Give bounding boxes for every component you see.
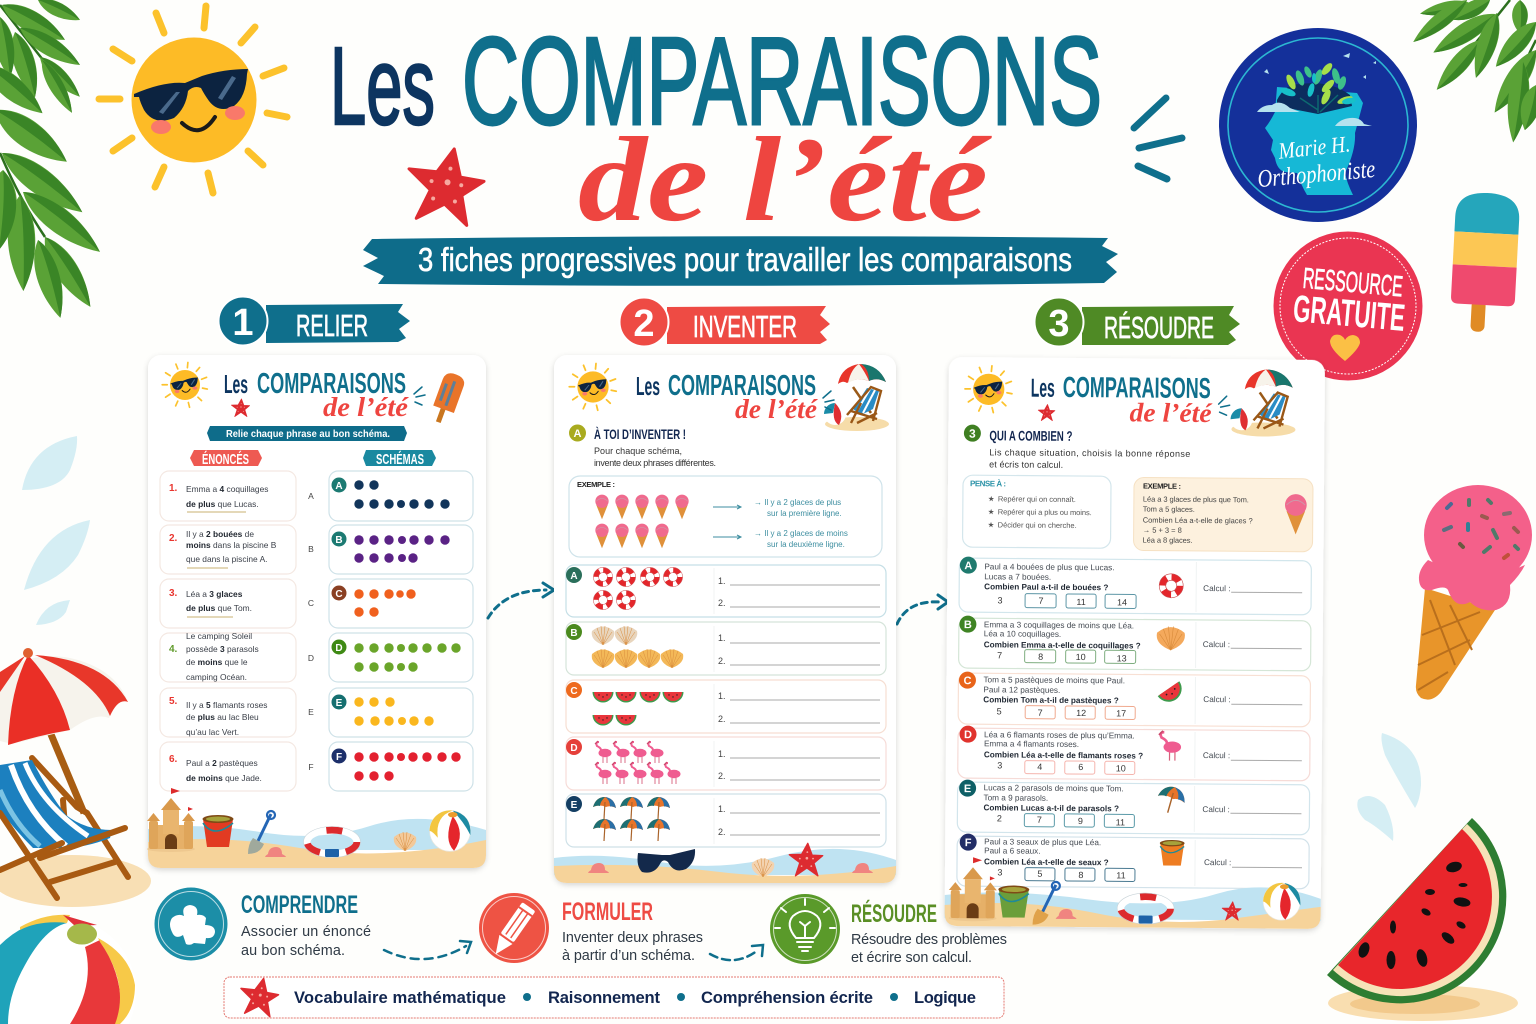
problem A: Calcul : [1203, 584, 1231, 593]
step 3 heading: résoudre: RÉSOUDRE [1104, 310, 1214, 345]
step 3 heading: résoudre [1034, 298, 1240, 346]
badge: ressource gratuite [1274, 232, 1422, 380]
letters between columns: E [308, 707, 314, 717]
row D: flamingos [566, 737, 886, 790]
problem F: Calcul : [1204, 858, 1231, 867]
footer: skills strip [224, 976, 1004, 1018]
problem F: F [965, 837, 972, 849]
row B: shells [566, 622, 886, 675]
example box: sur la première ligne. [767, 509, 842, 518]
pense à box: Repérer qui on connaît. [998, 494, 1076, 504]
letters between columns: A [308, 491, 314, 501]
row E: parasols: E [571, 800, 578, 811]
problem E: Combien Lucas a-t-il de parasols ? [983, 803, 1119, 813]
logo: Marie H. Orthophoniste: Orthophoniste [1256, 156, 1376, 193]
row D: flamingos: 2. [718, 771, 726, 781]
row C: watermelons: 1. [718, 691, 726, 701]
pense à box: Décider qui on cherche. [998, 520, 1077, 530]
arrow: formuler to résoudre [710, 945, 763, 960]
fiche 2 beach strip [554, 843, 896, 883]
logo clouds and birds [1257, 53, 1376, 126]
schema letter badges: D [335, 643, 343, 654]
problem E [957, 780, 1310, 835]
statements list: Léa a 3 glaces [186, 589, 243, 599]
statements list: de plus que Tom. [186, 603, 252, 613]
statements list: 1. [169, 483, 178, 494]
icon: small sun [162, 362, 207, 407]
example box: EXEMPLE : [577, 480, 615, 489]
problem F: Paul a 3 seaux de plus que Léa. [984, 837, 1101, 847]
problem A: Combien Paul a-t-il de bouées ? [984, 582, 1108, 592]
letters between columns: D [308, 653, 314, 663]
row A: life rings: A [570, 571, 578, 582]
decoration: small sparks [823, 391, 834, 410]
problem B [959, 616, 1311, 671]
title: de l’été [578, 113, 993, 247]
letters between columns: C [308, 598, 314, 608]
row D: flamingos: D [570, 743, 578, 754]
schema A dots [354, 480, 450, 509]
row A: life rings [566, 565, 886, 617]
illustration: beach chair and umbrella [0, 648, 151, 907]
problem D: 3 [997, 760, 1002, 770]
problem F: 11 [1116, 870, 1126, 880]
problem B: 8 [1038, 652, 1043, 662]
problem C: Tom a 5 pastèques de moins que Paul. [983, 675, 1125, 685]
badge: ressource gratuite: RESSOURCE [1302, 263, 1404, 303]
statements list: Paul a 2 pastèques [186, 758, 258, 768]
column heading: énoncés: ÉNONCÉS [202, 451, 249, 468]
title [330, 13, 1102, 247]
problem C: C [963, 675, 972, 687]
icon: orange popsicle [428, 371, 467, 426]
problem E: E [964, 783, 971, 795]
activity heading: À TOI D’INVENTER ! [594, 426, 686, 442]
decoration: small sparks [414, 387, 425, 405]
problem E: Lucas a 2 parasols de moins que Tom. [984, 783, 1124, 793]
activity heading [964, 425, 1190, 471]
problem D: Calcul : [1203, 751, 1230, 760]
statements list: 2. [169, 533, 178, 544]
problem F: 3 [997, 867, 1003, 877]
fiche 3 title: Les [1031, 373, 1055, 403]
decoration: water drops left [22, 436, 90, 625]
problem F: Combien Léa a-t-elle de seaux ? [984, 857, 1109, 867]
example box: → Il y a 2 glaces de plus [754, 498, 841, 507]
problem B: Combien Emma a-t-elle de coquillages ? [984, 640, 1141, 651]
skill: formuler: FORMULER [562, 898, 653, 926]
problem C: 12 [1076, 708, 1086, 718]
illustration: big ice cream cone [1416, 485, 1532, 700]
pense à box: Repérer qui a plus ou moins. [998, 507, 1092, 517]
step 1 heading: relier [218, 296, 410, 346]
panel: fiche 2 inventer [554, 355, 896, 883]
fiche 3 title: COMPARAISONS [1063, 372, 1211, 405]
example box: sur la deuxième ligne. [767, 540, 845, 549]
problem E: 7 [1037, 815, 1042, 825]
icon: small sun [569, 364, 616, 410]
arrow: card 2 to card 3 [897, 595, 948, 624]
schema letter badges: C [335, 589, 343, 600]
fiche 1 instruction banner [207, 426, 407, 441]
illustration: beach ball [0, 915, 136, 1024]
skill: comprendre [154, 888, 371, 960]
row E: parasols: 1. [718, 804, 726, 814]
fiche 3 title: de l’été [1129, 397, 1213, 428]
exemple box: → 5 + 3 = 8 [1143, 526, 1182, 535]
row B: shells: B [570, 628, 578, 639]
icon: sun with sunglasses [99, 6, 287, 193]
fiche 3 beach strip [945, 857, 1321, 929]
problem E: 9 [1078, 816, 1083, 826]
icon: small star [231, 399, 250, 417]
banner: subtitle: 3 fiches progressives pour travailler les comparaisons [418, 241, 1072, 278]
footer: skills strip: Vocabulaire mathématique [294, 988, 506, 1007]
skill: formuler: Inventer deux phrases [562, 930, 703, 946]
fiche 1 title: de l’été [323, 392, 409, 422]
schema C dots [354, 589, 416, 617]
schema E dots [354, 697, 434, 726]
logo: Marie H. Orthophoniste: Marie H. [1276, 131, 1351, 164]
skill: formuler: à partir d’un schéma. [562, 948, 695, 964]
schema letter badges [332, 478, 346, 764]
statements list: de plus au lac Bleu [186, 712, 259, 722]
statements list: Il y a 5 flamants roses [186, 700, 267, 710]
statements list: de plus que Lucas. [186, 499, 259, 509]
problem C: 7 [1038, 708, 1043, 718]
statements list: Emma a 4 coquillages [186, 484, 268, 494]
fiche 1 title [224, 368, 409, 422]
statements list: 5. [169, 696, 178, 707]
problem B: Emma a 3 coquillages de moins que Léa. [984, 620, 1134, 630]
icon: beach chair set [1230, 369, 1296, 437]
column heading: schémas [363, 450, 436, 468]
statements list: 6. [169, 754, 178, 765]
problem B: 7 [997, 650, 1002, 660]
problem A: Paul a 4 bouées de plus que Lucas. [984, 562, 1115, 572]
skill: comprendre: Associer un énoncé [241, 924, 371, 940]
problem C [958, 672, 1311, 727]
schema F dots [354, 752, 461, 781]
pense à box: ★ [988, 520, 995, 529]
decoration: water drops right [1357, 733, 1421, 841]
row A: life rings: 1. [718, 576, 726, 586]
letters between columns: F [308, 762, 314, 772]
problem D: Combien Léa a-t-elle de flamants roses ? [984, 750, 1143, 761]
problem C: Calcul : [1203, 695, 1231, 704]
step 2 heading: inventer [620, 298, 830, 346]
row B: shells: 2. [718, 656, 726, 666]
skill: résoudre: RÉSOUDRE [851, 899, 937, 928]
letters between columns [308, 491, 314, 772]
problem B: Calcul : [1203, 640, 1230, 649]
problem B: B [964, 619, 972, 631]
fiche 2 title [636, 370, 818, 424]
icon: footer starfish [238, 976, 280, 1017]
decoration: palm leaves top left [0, 0, 108, 321]
exemple box: Combien Léa a-t-elle de glaces ? [1143, 516, 1253, 525]
problem C: Combien Tom a-t-il de pastèques ? [983, 695, 1119, 705]
activity heading: A [574, 428, 582, 440]
skill: comprendre: COMPRENDRE [241, 891, 358, 919]
column heading: énoncés [190, 450, 262, 468]
problem B: Léa a 10 coquillages. [984, 629, 1061, 639]
row C: watermelons [566, 680, 886, 733]
problem A: 11 [1076, 597, 1086, 607]
fiche 1 beach strip [147, 788, 486, 868]
exemple box: Léa a 3 glaces de plus que Tom. [1143, 495, 1249, 504]
problem A: 14 [1117, 597, 1127, 607]
icon: beach chair set [824, 364, 889, 431]
problem D: 4 [1037, 762, 1042, 772]
problem C: 17 [1116, 708, 1126, 718]
problem E: Calcul : [1202, 805, 1230, 814]
example box [569, 476, 882, 557]
step 2 heading: inventer: INVENTER [693, 309, 797, 344]
problem E: Tom a 9 parasols. [984, 793, 1048, 803]
schema letter badges: E [336, 698, 343, 709]
statements list: Le camping Soleil [186, 631, 252, 641]
problem A [959, 557, 1311, 615]
activity heading: 3 [969, 427, 976, 441]
badge: ressource gratuite: GRATUITE [1291, 288, 1407, 340]
activity heading: Pour chaque schéma, [594, 446, 682, 456]
footer: skills strip: Raisonnement [548, 988, 660, 1007]
fiche 2 title: COMPARAISONS [668, 370, 816, 402]
skill: formuler [479, 893, 703, 964]
icon: heart [1330, 335, 1360, 361]
fiche 3 title [1030, 372, 1213, 428]
problem E: 2 [997, 813, 1002, 823]
arrow: comprendre to formuler [384, 941, 471, 959]
exemple box: EXEMPLE : [1143, 482, 1181, 491]
skill: résoudre [770, 894, 1007, 966]
fiche 1 title: Les [224, 369, 248, 399]
logo head silhouette [1265, 87, 1363, 195]
icon: sunglasses [638, 849, 695, 873]
step 2 heading: inventer: 2 [633, 303, 655, 345]
row A: life rings: 2. [718, 598, 726, 608]
fiche 2 title: de l’été [735, 394, 818, 424]
skill: comprendre: au bon schéma. [241, 943, 345, 959]
problem F: Paul a 6 seaux. [984, 846, 1041, 856]
arrow: card 1 to card 2 [488, 583, 554, 618]
decoration: palm leaves top right [1408, 0, 1536, 144]
icon: red starfish [402, 143, 488, 227]
problem D: D [964, 729, 972, 741]
decoration: teal sparks [1134, 98, 1182, 179]
icon: small sun [965, 366, 1012, 413]
problem A: Lucas a 7 bouées. [984, 572, 1051, 582]
statements list: que dans la piscine A. [186, 554, 267, 564]
logo tree leaves [1277, 61, 1356, 114]
pense à box: ★ [988, 507, 995, 516]
problem C: 5 [997, 706, 1002, 716]
activity heading: Lis chaque situation, choisis la bonne réponse [989, 447, 1190, 459]
footer: skills strip: Compréhension écrite [701, 988, 873, 1007]
problem A: A [964, 560, 972, 572]
row E: parasols [566, 794, 886, 847]
statements list: de moins que le [186, 657, 248, 667]
activity heading [569, 424, 716, 468]
column heading: schémas: SCHÉMAS [376, 451, 424, 468]
skill: résoudre: et écrire son calcul. [851, 950, 972, 966]
schema letter badges: A [335, 481, 343, 492]
statements list: 3. [169, 588, 178, 599]
example box: → Il y a 2 glaces de moins [754, 529, 848, 538]
statements list: moins dans la piscine B [186, 540, 277, 550]
decoration: small sparks [1219, 396, 1230, 415]
schema B dots [354, 535, 450, 563]
exemple box [1133, 477, 1313, 552]
problem F [957, 834, 1309, 889]
problem B: 10 [1076, 652, 1086, 662]
footer: skills strip: Logique [914, 988, 976, 1007]
illustration: popsicle [1449, 191, 1520, 334]
row D: flamingos: 1. [718, 749, 726, 759]
problem E: 11 [1116, 817, 1125, 827]
schema letter badges: B [335, 535, 343, 546]
problem B: 13 [1117, 653, 1127, 663]
schema D dots [354, 643, 461, 672]
fiche 2 title: Les [636, 371, 660, 401]
skill: résoudre: Résoudre des problèmes [851, 932, 1007, 948]
problem F: 5 [1037, 869, 1042, 879]
row B: shells: 1. [718, 633, 726, 643]
step 1 heading: relier: RELIER [296, 308, 368, 343]
icon: pencil [489, 902, 535, 959]
problem A: 3 [998, 595, 1003, 605]
panel: fiche 3 résoudre [945, 357, 1325, 929]
row C: watermelons: C [570, 686, 578, 697]
icon: light bulb [775, 899, 835, 951]
pense à box: ★ [988, 494, 995, 503]
step 3 heading: résoudre: 3 [1048, 303, 1070, 345]
step 1 heading: relier: 1 [232, 302, 254, 344]
icon: small star [1038, 404, 1055, 421]
activity heading: et écris ton calcul. [989, 459, 1063, 470]
problem A: 7 [1039, 596, 1044, 606]
pense à box [963, 475, 1111, 548]
problem D: Emma a 4 flamants roses. [984, 739, 1079, 749]
row E: parasols: 2. [718, 827, 726, 837]
icon: puzzle pieces [170, 905, 215, 945]
problem F: 8 [1078, 870, 1083, 880]
problem D: 10 [1116, 763, 1126, 773]
problem C: Paul a 12 pastèques. [983, 685, 1060, 695]
logo: Marie H. Orthophoniste [1219, 28, 1417, 222]
illustration: watermelon slice [1327, 818, 1518, 1021]
fiche 1 instruction banner: Relie chaque phrase au bon schéma. [226, 429, 390, 440]
exemple box: Tom a 5 glaces. [1143, 505, 1195, 514]
title: COMPARAISONS [462, 13, 1102, 151]
statements list: Il y a 2 bouées de [186, 529, 254, 539]
activity heading: invente deux phrases différentes. [594, 458, 716, 468]
problem D [958, 726, 1310, 781]
letters between columns: B [308, 544, 314, 554]
problem D: 6 [1078, 762, 1083, 772]
statements list: camping Océan. [186, 672, 247, 682]
problem D: Léa a 6 flamants roses de plus qu’Emma. [984, 730, 1135, 740]
title: Les [330, 25, 435, 148]
statements list: 4. [169, 644, 178, 655]
exemple box: Léa a 8 glaces. [1143, 536, 1193, 545]
statements list: qu’au lac Vert. [186, 727, 239, 737]
statements list: possède 3 parasols [186, 644, 259, 654]
statements list: de moins que Jade. [186, 773, 262, 783]
panel: fiche 1 relier [147, 355, 486, 868]
banner: subtitle [363, 236, 1118, 286]
schema letter badges: F [336, 752, 342, 763]
activity heading: QUI A COMBIEN ? [989, 427, 1072, 444]
row C: watermelons: 2. [718, 714, 726, 724]
schemas boxes [329, 471, 473, 791]
fiche 1 title: COMPARAISONS [257, 368, 406, 400]
pense à box: PENSE À : [970, 479, 1006, 488]
statements list [160, 471, 296, 791]
